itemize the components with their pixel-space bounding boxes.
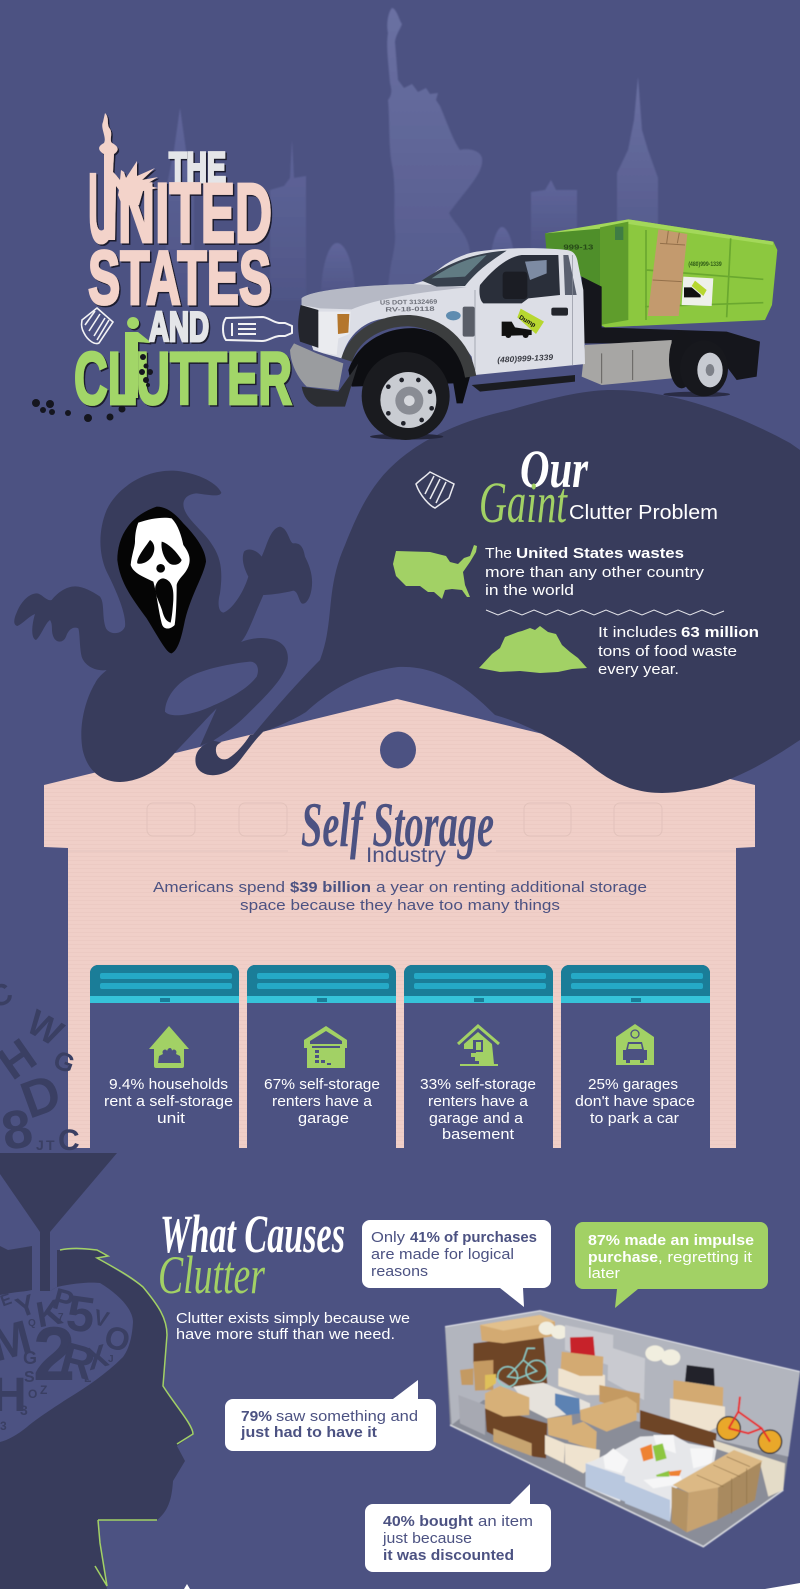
cab windows xyxy=(479,255,560,303)
brain letters: 2 xyxy=(33,1312,75,1397)
dark blob background xyxy=(253,390,800,793)
front wheel xyxy=(362,352,450,440)
lamps xyxy=(539,1322,680,1365)
callout: 41% of purchases xyxy=(362,1220,551,1307)
ghostface mask xyxy=(117,507,206,653)
card: 67% self-storage renters: renters have a xyxy=(272,1093,373,1110)
callout: 41% of purchases: 41% of purchases xyxy=(410,1229,537,1246)
text: United States wastes xyxy=(485,545,705,599)
door logo: Dump xyxy=(518,314,537,329)
card: 25% garages no car space: 25% garages xyxy=(588,1076,678,1093)
title: The United States and Clutter xyxy=(74,113,292,420)
text: $39 billion: Americans spend xyxy=(153,879,285,896)
callout: 40% discounted: it was discounted xyxy=(383,1547,514,1564)
letters entering funnel: W xyxy=(20,1001,70,1054)
title: The United States and Clutter: AND xyxy=(149,303,209,350)
letters entering funnel: C xyxy=(58,1124,80,1157)
ghost body xyxy=(14,471,312,782)
text: $39 billion: a year on renting additional storage xyxy=(376,879,647,896)
red bag xyxy=(570,1337,595,1356)
teal bicycle xyxy=(498,1348,547,1387)
heading xyxy=(479,439,718,535)
icon: USA map xyxy=(393,545,477,599)
green head outline xyxy=(60,1248,193,1586)
card: 67% self-storage renters xyxy=(247,965,396,1148)
hood xyxy=(302,284,467,309)
callout: 79% just had to have it: saw something and xyxy=(276,1408,418,1425)
text: clutter exists: Clutter exists simply because we xyxy=(176,1310,410,1327)
heading: Self Storage Industry xyxy=(301,789,494,867)
dumpster: (480)999-1339 xyxy=(688,262,722,268)
card: 9.4% households xyxy=(90,965,239,1148)
wheel arch xyxy=(348,328,470,403)
icon: person dropping litter xyxy=(125,317,150,398)
dumpster xyxy=(545,219,777,327)
brain letters: R xyxy=(55,1331,101,1390)
red bicycle xyxy=(717,1397,782,1453)
callout: 41% of purchases: Only xyxy=(371,1229,406,1246)
brain letters: V xyxy=(91,1304,112,1332)
door logo xyxy=(502,309,544,338)
skyline silhouette xyxy=(166,8,658,300)
card: 25% garages no car space xyxy=(561,965,710,1148)
card: 67% self-storage renters: 67% self-storage xyxy=(264,1076,380,1093)
heading: Our xyxy=(520,439,589,499)
brain letters: G xyxy=(23,1348,37,1368)
icon: plastic cup xyxy=(416,472,454,508)
card: 33% garage and basement xyxy=(404,965,553,1148)
icon: house with people xyxy=(149,1026,189,1068)
text: clutter exists: have more stuff than we need. xyxy=(176,1326,395,1343)
bottom edge marks xyxy=(184,1583,800,1589)
letters entering funnel: D xyxy=(14,1063,69,1130)
brain letters: 3 xyxy=(20,1402,28,1418)
brain letters: 3 xyxy=(0,1419,7,1433)
letters entering funnel: G xyxy=(50,1044,79,1079)
ground shadows xyxy=(370,434,443,440)
mid boxes and dressers xyxy=(513,1352,725,1432)
chassis xyxy=(582,277,760,380)
logo sticker xyxy=(682,277,713,306)
storage unit illustration xyxy=(445,1311,800,1547)
brain letters: P xyxy=(49,1282,77,1319)
callout: 79% just had to have it: just had to have it xyxy=(240,1424,377,1441)
toolbox xyxy=(582,340,672,385)
title: The United States and Clutter: STATES xyxy=(88,236,271,321)
brain letters: K xyxy=(33,1291,66,1335)
callout: 87% impulse purchase: 87% made an impulse xyxy=(588,1232,754,1249)
ghost inner gap xyxy=(165,662,258,715)
door handle xyxy=(551,308,568,316)
card: 9.4% households: rent a self-storage xyxy=(104,1093,233,1110)
card: 25% garages no car space: don't have space xyxy=(575,1093,695,1110)
card: 33% garage and basement: basement xyxy=(442,1126,515,1143)
garage building roof and wall xyxy=(44,699,755,1148)
brain letters: Q xyxy=(28,1318,36,1329)
brain xyxy=(0,1283,133,1442)
brain letters: Z xyxy=(40,1383,47,1397)
text: food waste: It includes xyxy=(598,624,677,641)
heading: Self Storage Industry: Self Storage xyxy=(301,789,494,860)
brain letters: Y xyxy=(12,1288,40,1324)
brain letters xyxy=(0,1282,134,1433)
callout: 79% just had to have it xyxy=(225,1380,436,1451)
truck lettering: (480)999-1339 xyxy=(497,353,554,365)
text: clutter exists xyxy=(176,1310,410,1343)
grille and headlight xyxy=(298,305,320,348)
card: 33% garage and basement: garage and a xyxy=(429,1110,524,1127)
wood table xyxy=(485,1408,717,1458)
icon: garage xyxy=(304,1026,347,1068)
icon: food waste pile xyxy=(479,626,587,673)
callout: 40% discounted: 40% bought xyxy=(383,1513,473,1530)
ghost figure xyxy=(14,471,312,782)
callout: 87% impulse purchase xyxy=(575,1222,768,1308)
text: United States wastes: more than any other country xyxy=(485,564,705,581)
heading: What Causes Clutter: What Causes xyxy=(160,1204,345,1264)
letters entering funnel: J xyxy=(36,1137,44,1153)
running board xyxy=(472,375,575,392)
card: 9.4% households: 9.4% households xyxy=(109,1076,228,1093)
callout: 41% of purchases: are made for logical xyxy=(371,1246,514,1263)
callout: 79% just had to have it: 79% xyxy=(241,1408,272,1425)
text: food waste: tons of food waste xyxy=(598,643,737,660)
title: The United States and Clutter: CLUTTER xyxy=(74,337,292,420)
headboards xyxy=(565,1325,645,1400)
callout: 40% discounted: just because xyxy=(382,1530,472,1547)
back left furniture xyxy=(460,1315,555,1391)
callout: 87% impulse purchase: , regretting it xyxy=(658,1249,753,1266)
heading: Gaint xyxy=(479,470,568,535)
fender flare xyxy=(347,321,471,377)
text: food waste xyxy=(598,624,759,678)
truck cab xyxy=(302,248,585,375)
heading: What Causes Clutter xyxy=(158,1204,345,1305)
callout: 41% of purchases: reasons xyxy=(371,1263,428,1280)
icon: garage with car xyxy=(616,1024,654,1065)
card: 67% self-storage renters: garage xyxy=(298,1110,349,1127)
ghost tail hook xyxy=(195,732,263,775)
icon: house with basement stairs xyxy=(458,1026,499,1066)
letters entering funnel: T xyxy=(46,1137,55,1153)
black bag xyxy=(685,1365,715,1386)
text: United States wastes: in the world xyxy=(485,582,574,599)
text: food waste: 63 million xyxy=(681,624,759,641)
title: The United States and Clutter: NITED xyxy=(118,166,272,260)
walls and floor xyxy=(445,1311,800,1547)
truck lettering: RV-18-0118 xyxy=(385,306,435,314)
front boxes xyxy=(485,1386,600,1473)
roof circular window xyxy=(380,732,416,768)
funnel xyxy=(0,1153,117,1291)
head silhouette with brain xyxy=(0,1246,193,1589)
card: 9.4% households: unit xyxy=(157,1110,186,1127)
card: 33% garage and basement: renters have a xyxy=(428,1093,529,1110)
brain letters: S xyxy=(24,1369,35,1386)
callout: 40% discounted xyxy=(365,1484,551,1572)
text: $39 billion: $39 billion xyxy=(290,879,371,896)
callout: 87% impulse purchase: purchase xyxy=(588,1249,658,1266)
icon: plastic cup xyxy=(82,308,113,344)
left shelf xyxy=(458,1395,485,1435)
card: 33% garage and basement: 33% self-storage xyxy=(420,1076,536,1093)
text: $39 billion xyxy=(153,879,647,914)
icon: falling litter dots xyxy=(32,354,153,422)
truck lettering xyxy=(380,299,554,365)
bumper xyxy=(290,343,343,390)
torch and crown of the U xyxy=(99,113,158,240)
text: food waste: every year. xyxy=(598,661,679,678)
garage door cards xyxy=(90,965,710,1148)
truck lettering: US DOT 3132469 xyxy=(380,299,438,307)
statue of liberty silhouette xyxy=(387,8,482,290)
text: United States wastes: United States wastes xyxy=(516,545,684,562)
text: $39 billion: space because they have too many things xyxy=(240,897,560,914)
brain letters: L xyxy=(84,1371,91,1385)
heading: Clutter Problem xyxy=(569,502,718,524)
brain letters: O xyxy=(101,1318,134,1359)
rear wheels xyxy=(669,332,694,388)
title: The United States and Clutter: THE xyxy=(169,144,226,192)
text: United States wastes: The xyxy=(485,545,512,562)
letters entering funnel xyxy=(0,976,80,1162)
brain letters: J xyxy=(108,1354,114,1365)
title: The United States and Clutter: U xyxy=(88,153,115,263)
icon: plastic bottle xyxy=(223,317,292,341)
heading: What Causes Clutter: Clutter xyxy=(158,1245,266,1305)
sofa xyxy=(586,1435,717,1522)
truck with green dumpster xyxy=(290,219,777,440)
section: Our Giant Clutter Problem xyxy=(393,439,759,678)
stacked boxes xyxy=(672,1450,763,1532)
dumpster: 999-13 xyxy=(563,242,593,251)
brain letters: X xyxy=(82,1337,113,1377)
right counter xyxy=(713,1440,785,1497)
heading: Self Storage Industry: Industry xyxy=(366,844,447,867)
roof windows xyxy=(147,803,662,836)
callout: 40% discounted: an item xyxy=(478,1513,533,1530)
mirror xyxy=(503,272,527,299)
brain letters: 7 xyxy=(58,1312,64,1323)
callout: 87% impulse purchase: later xyxy=(588,1265,620,1282)
brain letters: 5 xyxy=(63,1284,98,1344)
brain letters: O xyxy=(28,1387,37,1401)
card: 25% garages no car space: to park a car xyxy=(590,1110,679,1127)
